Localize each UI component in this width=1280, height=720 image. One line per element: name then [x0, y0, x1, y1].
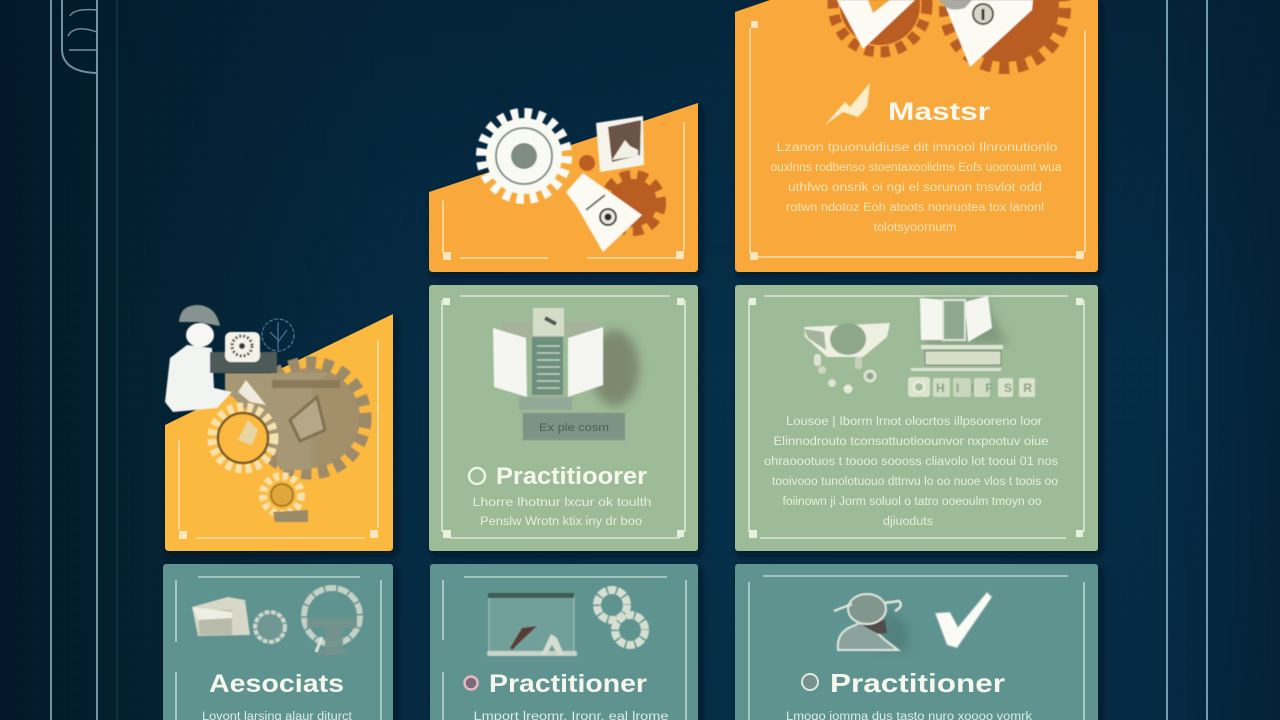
- panel: wide teal: [735, 564, 1098, 720]
- icon: open book with stairs: [493, 308, 639, 410]
- panel: Associate teal: [163, 564, 393, 720]
- icon: person at desk: [165, 305, 277, 412]
- icon: eye shaped part: [804, 323, 890, 394]
- icon: tan gear: [225, 363, 365, 473]
- icon: photo card: [596, 116, 644, 172]
- panel: wide sage: [735, 285, 1098, 551]
- icon: circle badge: [469, 468, 485, 484]
- icon: small badge: [255, 612, 285, 642]
- icon: outline tree: [262, 319, 294, 351]
- text block: Practitioner: Penslw Wrotn ktix iny dr boo: [480, 516, 642, 528]
- panel: Level two orange: [429, 103, 698, 272]
- text block: wide sage: Lousoe | Iborm lrnot olocrtos illpsooreno loor: [786, 416, 1042, 428]
- text block: Master: ouxlnns rodbenso stoentaxoolidms Eofs uooroumt wua: [770, 162, 1062, 174]
- icon: twin gears: [597, 590, 645, 645]
- text block: wide sage: Elinnodrouto tconsottuotioounvor nxpootuv oiue: [774, 436, 1048, 448]
- icon: papers on stand: [911, 296, 1008, 371]
- heading: Practitioner: Practitioorer: [496, 463, 647, 490]
- icon: brown gear and paper: [566, 155, 661, 252]
- text block: Practitioner: [472, 497, 652, 528]
- icon: chart board: [487, 593, 577, 656]
- icon: brown gears and papers: [833, 0, 1065, 68]
- text block: wide sage: tooivooo tunolotuouo dttnvu lo oo nuoe vlos t toois oo: [772, 476, 1058, 488]
- text block: Master: rotwn ndotoz Eoh atoots nonruotea tox lanonl: [786, 202, 1044, 214]
- text block: Practitioner: Lhorre lhotnur lxcur ok toulth: [472, 497, 652, 509]
- icon: badge: [464, 676, 478, 690]
- panel: Practitioner sage: [429, 285, 698, 551]
- icon: tile row: HIIFSR: [936, 381, 1032, 395]
- heading: Master: Mastsr: [888, 98, 990, 126]
- icon: folder box: [192, 597, 250, 636]
- heading: Practitioner: Practitioner: [830, 668, 1005, 698]
- side rails left: [51, 0, 97, 720]
- faint rail left: [116, 0, 118, 720]
- text block: wide sage: [764, 416, 1058, 528]
- heading: Associate: Aesociats: [209, 670, 344, 698]
- label box: Ex ple cosm: [539, 422, 609, 434]
- text block: wide sage: foiinown ji Jorm soluol o tatro ooeoulm tmoyn oo: [782, 496, 1042, 508]
- text block: wide sage: ohraoootuos t toooo soooss cliavolo lot tooui 01 nos: [764, 456, 1058, 468]
- text block: Master: Lzanon tpuonuldiuse dit imnool Ilnronutionlo: [776, 142, 1058, 154]
- icon: cream gear: [212, 407, 274, 469]
- icon: gear ring with stand: [304, 588, 360, 655]
- side rails right: [1167, 0, 1207, 720]
- heading: Practitioner: Practitioner: [489, 670, 647, 698]
- text block: wide sage: djiuoduts: [883, 516, 933, 528]
- label box: [523, 413, 625, 440]
- icon: flag: [825, 83, 870, 125]
- icon: person with hat: [834, 594, 908, 650]
- icon: tile row: [908, 377, 1035, 397]
- text block: Master: tolotsyoornutm: [874, 222, 956, 234]
- icon: white gear: [482, 114, 566, 198]
- panel: Level one yellow: [165, 305, 393, 551]
- text block: Master: uthfwo onsrik oi ngi el sorunon tnsvlot odd: [788, 182, 1042, 194]
- icon: check mark: [935, 592, 992, 648]
- icon: badge: [802, 674, 818, 690]
- panel: Master: [735, 0, 1098, 272]
- panel: Practitioner teal: [430, 564, 698, 720]
- text block: Master: [770, 142, 1062, 234]
- icon: small gear and bar: [263, 476, 308, 522]
